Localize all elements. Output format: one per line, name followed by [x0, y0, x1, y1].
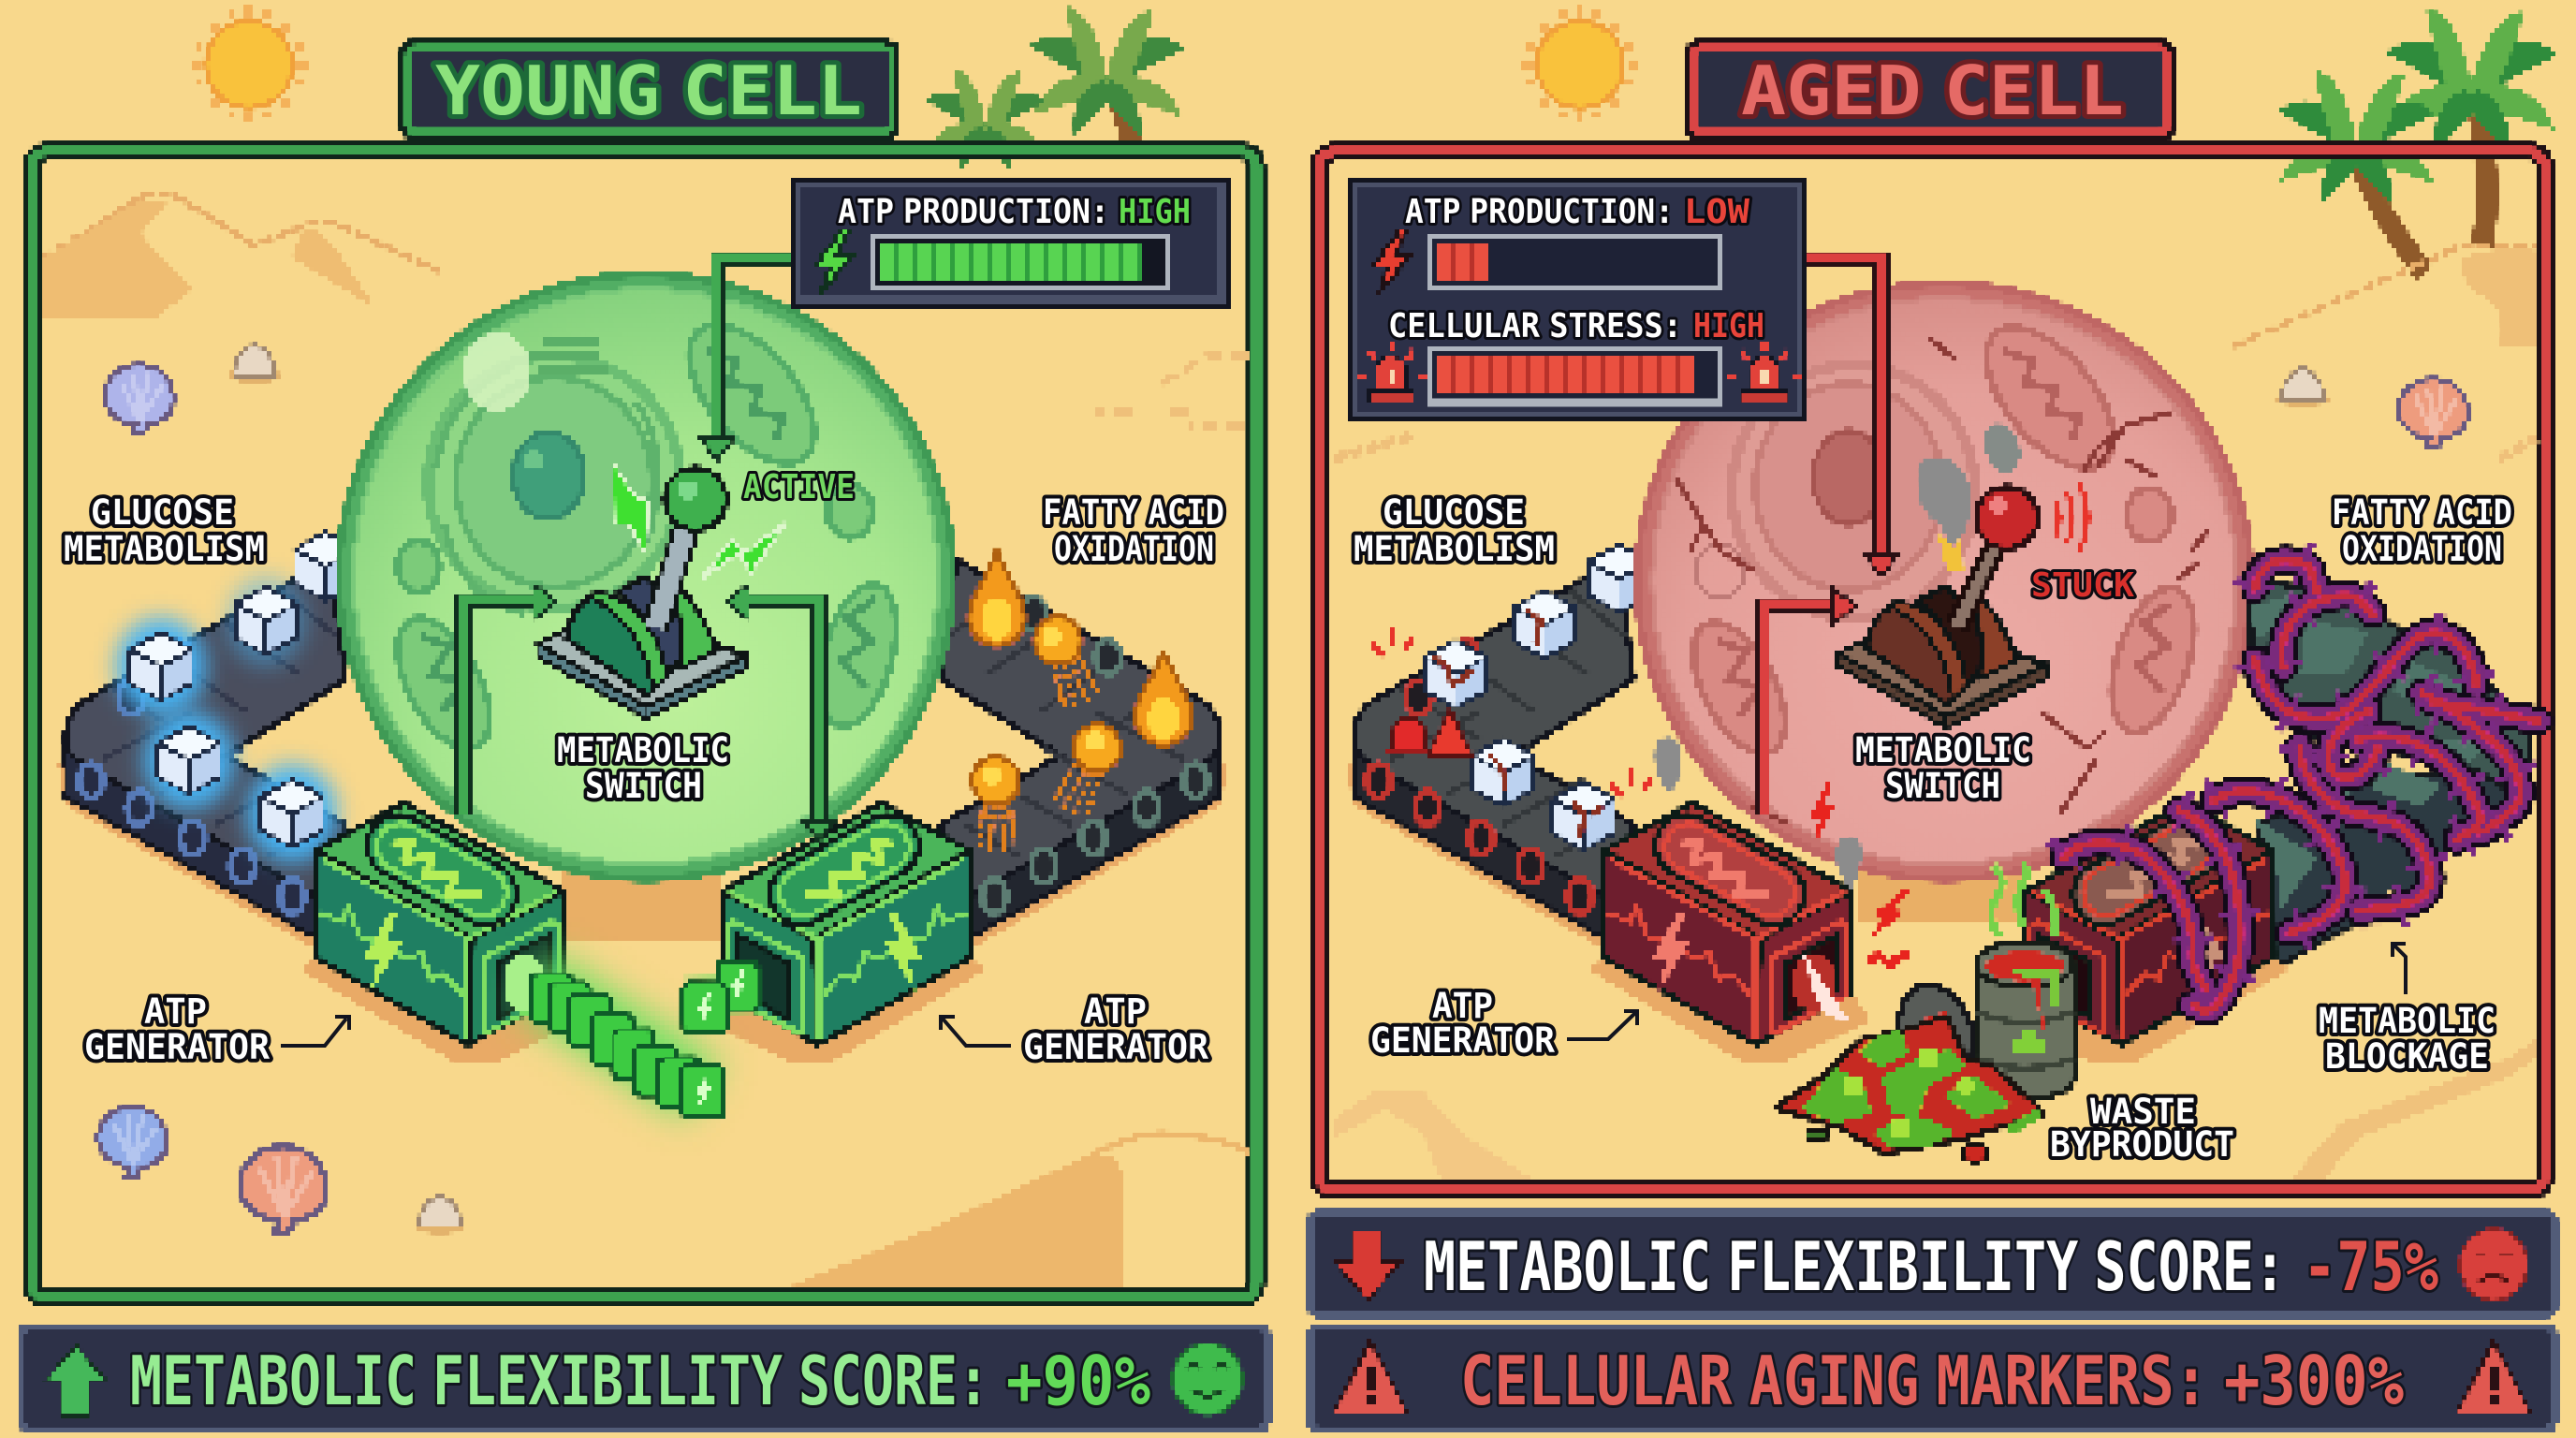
spark in generator port: [1792, 950, 1849, 1020]
sun: [1522, 7, 1638, 123]
label: stuck: STUCK: [2031, 566, 2134, 605]
label: ATP generator right: ATP: [1084, 991, 1147, 1032]
cell: aged: [1637, 284, 2251, 922]
label: metabolic switch: [1855, 730, 2031, 806]
label: fatty acid oxidation: [1043, 492, 1224, 569]
conveyor: glucose damaged: [1346, 560, 1633, 953]
sparks: [1809, 781, 1912, 970]
thorny blockage: [2064, 560, 2539, 1011]
palm trees: [2276, 7, 2557, 273]
label: glucose metabolism: GLUCOSE: [1383, 492, 1525, 533]
label: ATP generator right: [941, 991, 1209, 1067]
label: glucose metabolism: [64, 492, 265, 569]
ATP panel: [792, 180, 1228, 306]
label: ATP generator: ATP: [1432, 986, 1493, 1026]
label: waste byproduct: WASTE: [2090, 1092, 2196, 1132]
label: fatty acid oxidation: [2332, 492, 2512, 569]
label: metabolic blockage: [2319, 944, 2496, 1077]
metric: aging markers: +300%: [2224, 1342, 2404, 1420]
label: cellular stress high: CELLULAR STRESS:: [1388, 307, 1682, 345]
label: ATP generator: [1370, 986, 1637, 1061]
label: ATP generator right: GENERATOR: [1023, 1027, 1209, 1067]
palm trees: [925, 6, 1184, 170]
label: ATP generator: GENERATOR: [1370, 1020, 1556, 1061]
label: ATP production low: LOW: [1684, 193, 1749, 231]
metric: flexibility score young: +90%: [1006, 1342, 1150, 1420]
label: glucose metabolism: GLUCOSE: [91, 492, 234, 533]
sun: [191, 7, 307, 123]
label: metabolic blockage: BLOCKAGE: [2325, 1036, 2489, 1077]
frame: aged: [1320, 152, 2544, 1191]
conveyor: glucose: [58, 560, 345, 953]
title: aged cell: AGED CELL: [1741, 51, 2124, 130]
icon: sad face: [2460, 1229, 2527, 1300]
label: metabolic switch: SWITCH: [585, 766, 702, 806]
aged cell artwork: [1310, 7, 2557, 1430]
title plate: aged: [1689, 43, 2172, 137]
smoke: [1655, 423, 2020, 889]
glucose cubes: [116, 533, 357, 862]
label: ATP generator left: [84, 991, 349, 1067]
title plate: young: [403, 43, 896, 137]
label: metabolic switch: METABOLIC: [557, 730, 729, 770]
cell: young: [339, 274, 953, 941]
blocked conveyor and leaves: [2251, 580, 2531, 974]
metric: flexibility score aged: METABOLIC FLEXIBILITY SCORE:: [1424, 1227, 2286, 1306]
generator: failing: [1588, 803, 1870, 1064]
connector arrows: [1764, 259, 1898, 813]
label: ATP production low: ATP PRODUCTION:: [1405, 193, 1674, 231]
warning beacon and cone: [1387, 710, 1471, 756]
label: glucose metabolism: [1354, 492, 1555, 569]
label: ATP generator left: GENERATOR: [84, 1027, 271, 1067]
panel: aged cell: [1310, 7, 2557, 1430]
waste barrel: [1976, 866, 2074, 1099]
label: metabolic switch: METABOLIC: [1855, 730, 2031, 770]
connector arrows: [463, 259, 836, 841]
generators: [300, 803, 987, 1064]
label: waste byproduct: BYPRODUCT: [2050, 1124, 2234, 1165]
label: fatty acid oxidation: FATTY ACID: [2332, 492, 2512, 533]
score bar: young: [21, 1327, 1267, 1430]
label: metabolic switch: [557, 730, 729, 806]
label: metabolic blockage: METABOLIC: [2319, 1001, 2496, 1041]
metric: flexibility score young: METABOLIC FLEXIBILITY SCORE:: [130, 1342, 989, 1420]
waste pile: [1776, 985, 2042, 1162]
fatty acid droplets: [969, 550, 1192, 850]
label: glucose metabolism: METABOLISM: [64, 529, 265, 569]
panel: young cell: [21, 6, 1267, 1430]
label: fatty acid oxidation: FATTY ACID: [1043, 492, 1224, 533]
shells: [98, 345, 466, 1234]
label: ATP generator left: ATP: [144, 991, 207, 1032]
label: fatty acid oxidation: OXIDATION: [1054, 529, 1214, 569]
damaged cubes: [1425, 545, 1650, 850]
metric: aging markers: CELLULAR AGING MARKERS:: [1460, 1342, 2208, 1420]
switch: stuck: [1838, 482, 2087, 727]
metric: flexibility score aged: -75%: [2303, 1227, 2438, 1306]
label: metabolic switch: SWITCH: [1885, 766, 2000, 806]
shells: [2276, 369, 2467, 448]
dunes: [1334, 245, 2537, 1181]
label: active: ACTIVE: [743, 468, 855, 506]
frame: young: [32, 152, 1256, 1298]
label: ATP production: HIGH: [1119, 193, 1191, 231]
dunes: [41, 195, 1250, 1287]
icon: warning right: [2456, 1341, 2531, 1414]
icon: smiley: [1173, 1343, 1242, 1415]
ATP and stress panel: [1349, 180, 1806, 420]
label: fatty acid oxidation: OXIDATION: [2342, 529, 2502, 569]
switch: active: [538, 463, 786, 718]
title: young cell: YOUNG CELL: [435, 51, 862, 130]
conveyor: fatty acid: [941, 560, 1228, 953]
generator: blocked: [2007, 803, 2290, 1064]
alert marks: [1371, 627, 1651, 796]
ATP batteries: [504, 955, 758, 1117]
icon: down arrow: [1335, 1231, 1400, 1300]
icon: up arrow: [45, 1345, 107, 1416]
label: glucose metabolism: METABOLISM: [1354, 529, 1555, 569]
label: ATP production: ATP PRODUCTION:: [838, 193, 1109, 231]
young cell artwork: [21, 6, 1267, 1430]
score bar: aged markers: [1310, 1327, 2554, 1430]
label: waste byproduct: [2050, 1092, 2234, 1165]
score bar: aged flexibility: [1310, 1213, 2554, 1314]
icon: warning left: [1333, 1341, 1408, 1414]
label: cellular stress high: HIGH: [1693, 307, 1764, 345]
